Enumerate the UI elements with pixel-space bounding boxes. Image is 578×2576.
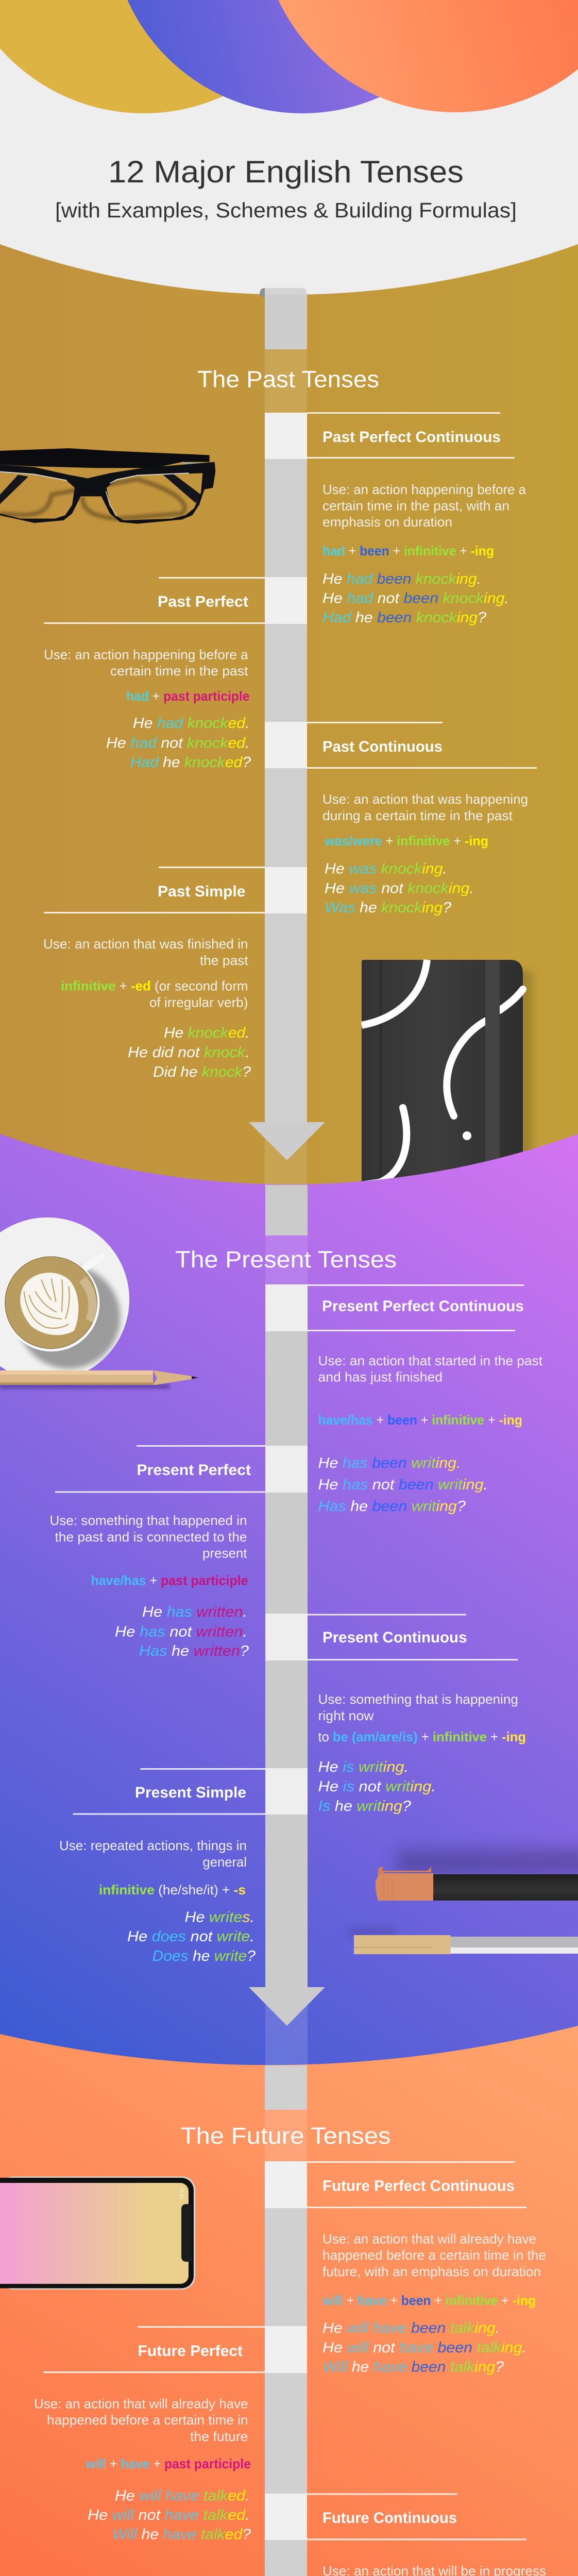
use description: emphasis on duration [322, 514, 452, 530]
examples: He will have been talking. [322, 2320, 500, 2336]
examples: He writes. [184, 1909, 254, 1926]
use description: the past and is connected to the [55, 1529, 247, 1545]
examples: He is writing. [318, 1759, 409, 1775]
heading: present perfect: Present Perfect [137, 1462, 251, 1479]
examples [106, 715, 251, 771]
use description: happened before a certain time in the [322, 2247, 546, 2263]
icon: white pen with gold cap [349, 1928, 578, 1954]
examples [115, 1604, 249, 1659]
examples: He will have talked. [115, 2487, 249, 2504]
examples [318, 1455, 488, 1515]
use description: Use: an action happening before a [44, 647, 248, 663]
use description: Use: an action that will already have [322, 2231, 536, 2246]
examples: He did not knock. [128, 1044, 249, 1061]
formula: infinitive + -ed (or second form [61, 978, 248, 993]
panel: present continuous [308, 1614, 526, 1815]
examples: He was not knocking. [325, 880, 474, 896]
use description: general [203, 1854, 247, 1870]
use description [43, 936, 248, 968]
use description: Use: an action that started in the past [318, 1353, 543, 1368]
examples [325, 860, 474, 916]
formula: to be (am/are/is) + infinitive + -ing [318, 1729, 526, 1744]
title block: [with Examples, Schemes & Building Formulas] [55, 198, 517, 222]
icon: smartphone: 10:10 [179, 2188, 184, 2199]
future section background [0, 2009, 578, 2576]
examples: He is not writing. [318, 1778, 436, 1795]
heading: the present tenses: The Present Tenses [175, 1246, 397, 1273]
use description: happened before a certain time in [47, 2412, 248, 2428]
examples [318, 1759, 436, 1815]
use description [34, 2396, 248, 2444]
panel: future perfect continuous [307, 2161, 546, 2375]
use description: Use: an action that will already have [34, 2396, 248, 2411]
formula [61, 978, 248, 1010]
examples: He has not written. [115, 1624, 247, 1640]
examples [127, 1909, 256, 1964]
use description: Use: something that happened in [49, 1513, 247, 1528]
examples [322, 2320, 526, 2375]
examples [322, 571, 509, 626]
use description: Use: an action happening before a [322, 482, 526, 497]
icon: smartphone [0, 2176, 195, 2290]
use description: and has just finished [318, 1369, 443, 1385]
formula: infinitive (he/she/it) + -s [99, 1882, 246, 1897]
present section background [0, 1108, 578, 2065]
icon: coffee cup on saucer [0, 1217, 129, 1381]
use description [44, 647, 248, 679]
title block [55, 155, 517, 222]
heading: present simple: Present Simple [135, 1784, 246, 1801]
examples: Does he write? [152, 1948, 256, 1964]
decorative top circles [0, 0, 578, 113]
examples: Will he have been talking? [322, 2359, 504, 2375]
heading: future continuous: Future Continuous [322, 2510, 457, 2527]
examples: He had not been knocking. [322, 590, 509, 607]
past section background [0, 244, 578, 1184]
examples: Did he knock? [153, 1064, 251, 1080]
panel: future continuous [307, 2494, 546, 2576]
use description [318, 1691, 518, 1723]
examples: Has he written? [139, 1643, 249, 1659]
use description: right now [318, 1708, 374, 1723]
examples [88, 2487, 251, 2543]
use description: certain time in the past, with an [322, 498, 509, 513]
use description: certain time in the past [110, 663, 248, 679]
icon: copper pen [376, 1850, 578, 1901]
panel: past perfect [44, 577, 265, 771]
panel: past simple [43, 867, 265, 1080]
heading: the past tenses: The Past Tenses [197, 366, 379, 393]
heading: the future tenses: The Future Tenses [180, 2123, 390, 2149]
examples: He knocked. [164, 1025, 249, 1041]
examples: Is he writing? [318, 1798, 412, 1815]
panel: past continuous [307, 722, 537, 916]
icon: pencil [0, 1370, 198, 1389]
formula: had + past participle [126, 688, 249, 704]
examples: He has been writing. [318, 1455, 461, 1471]
use description: Use: repeated actions, things in [59, 1838, 247, 1853]
examples: Will he have talked? [112, 2527, 251, 2543]
examples [128, 1025, 251, 1080]
icon: glasses [0, 448, 215, 524]
formula: will + have + been + infinitive + -ing [322, 2293, 536, 2308]
formula: had + been + infinitive + -ing [322, 543, 494, 558]
use description [318, 1353, 543, 1385]
examples: He was knocking. [325, 860, 447, 877]
use description [322, 482, 526, 530]
use description: present [202, 1546, 247, 1561]
heading: present perfect continuous: Present Perfect Continuous [322, 1298, 524, 1315]
panel: present simple [59, 1768, 265, 1964]
use description: during a certain time in the past [322, 808, 513, 823]
examples: He has written. [142, 1604, 247, 1620]
use description [49, 1513, 247, 1561]
use description: Use: an action that was finished in [43, 936, 248, 952]
examples: He had knocked. [133, 715, 250, 732]
heading: future perfect continuous: Future Perfect Continuous [322, 2177, 515, 2195]
use description: the past [200, 953, 248, 968]
panel: present perfect continuous [308, 1284, 543, 1515]
use description: Use: an action that was happening [322, 791, 528, 807]
heading: past perfect: Past Perfect [158, 594, 248, 610]
formula: will + have + past participle [85, 2456, 251, 2471]
heading: present continuous: Present Continuous [322, 1629, 467, 1646]
panel: present perfect [49, 1445, 265, 1659]
panel: past perfect continuous [307, 412, 526, 626]
examples: He will not have been talking. [322, 2340, 526, 2356]
examples: He will not have talked. [88, 2507, 249, 2523]
heading: past simple: Past Simple [158, 883, 245, 900]
formula: have/has + past participle [91, 1572, 248, 1588]
use description: future, with an emphasis on duration [322, 2264, 541, 2279]
use description: Use: something that is happening [318, 1691, 518, 1707]
formula: have/has + been + infinitive + -ing [318, 1412, 522, 1428]
use description [59, 1838, 247, 1870]
examples: Had he been knocking? [322, 609, 487, 626]
examples: He had not knocked. [106, 735, 249, 751]
examples: He has not been writing. [318, 1477, 488, 1493]
examples: Has he been writing? [318, 1498, 466, 1515]
heading: past perfect continuous: Past Perfect Continuous [322, 429, 501, 446]
panel: future perfect [34, 2326, 265, 2543]
formula: was/were + infinitive + -ing [324, 833, 488, 849]
examples: He had been knocking. [322, 571, 481, 587]
center timeline bar [249, 288, 325, 2576]
heading: future perfect: Future Perfect [138, 2343, 243, 2360]
use description: the future [190, 2429, 248, 2444]
use description [322, 791, 528, 823]
use description [322, 2231, 546, 2279]
examples: He does not write. [127, 1928, 254, 1945]
title block: 12 Major English Tenses [108, 155, 464, 189]
examples: Had he knocked? [130, 754, 251, 771]
icon: notebook [362, 960, 532, 1197]
heading: past continuous: Past Continuous [322, 738, 443, 755]
formula: of irregular verb) [149, 994, 248, 1010]
examples: Was he knocking? [325, 900, 452, 916]
